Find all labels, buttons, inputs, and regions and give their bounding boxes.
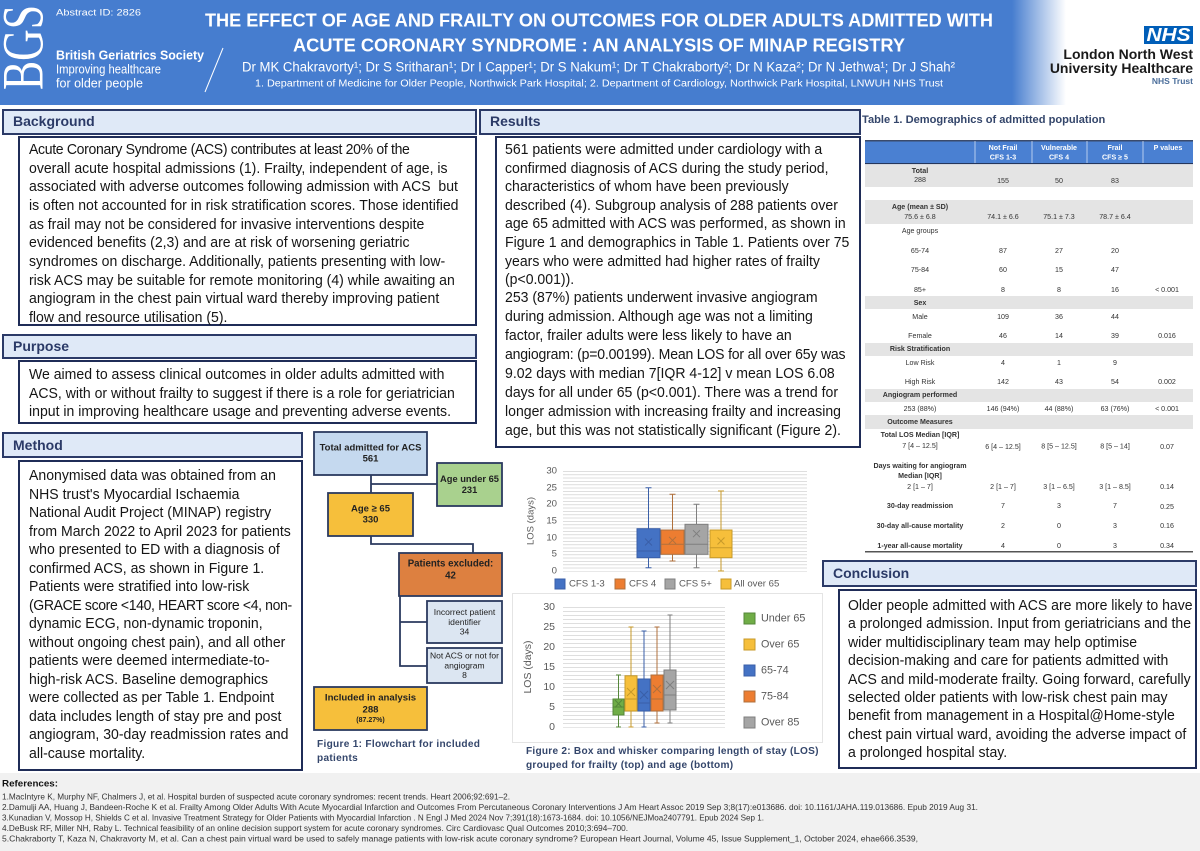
table header: Not Frail xyxy=(989,144,1017,152)
table rows: sex and risk: High Risk xyxy=(905,378,936,386)
legend: Over 65 xyxy=(761,638,799,650)
table rows: sex and risk: 39 xyxy=(1111,332,1119,340)
box: incorrect identifier: Incorrect patient xyxy=(434,607,496,617)
heading: purpose: Purpose xyxy=(13,338,69,354)
table rows: total and age: 50 xyxy=(1055,177,1063,185)
table rows: total and age xyxy=(892,167,1179,294)
table header: CFS 1-3 xyxy=(990,154,1016,162)
table rows: total and age: 288 xyxy=(914,176,926,184)
table rows: outcomes: 0.07 xyxy=(1160,443,1174,451)
legend: All over 65 xyxy=(734,578,779,590)
table rows: sex and risk: 43 xyxy=(1055,378,1063,386)
box: age 65 and over: 330 xyxy=(363,514,378,526)
table rows: total and age: 65-74 xyxy=(911,247,929,255)
table rows: outcomes: 3 xyxy=(1113,542,1117,550)
y axis labels: 15 xyxy=(546,516,557,526)
table rows: total and age: 15 xyxy=(1055,266,1063,274)
box: 65-74 xyxy=(638,631,650,727)
table rows: angiogram: Angiogram performed xyxy=(883,391,957,399)
table rows: outcomes: 0.34 xyxy=(1160,542,1174,550)
box: included: 288 xyxy=(362,704,379,716)
table rows: outcomes: 0.16 xyxy=(1160,522,1174,530)
table rows: outcomes: 2 xyxy=(1001,522,1005,530)
table rows: total and age: 20 xyxy=(1111,247,1119,255)
panel: purpose text xyxy=(18,360,477,424)
table rows: total and age: 87 xyxy=(999,247,1007,255)
table rows: sex and risk: 0.002 xyxy=(1158,378,1176,386)
box: not ACS xyxy=(427,648,502,683)
legend: 65-74 xyxy=(761,664,789,676)
table rows: sex and risk: Sex xyxy=(914,299,926,307)
box: included: (87.27%) xyxy=(356,717,385,724)
table rows: sex and risk: 1 xyxy=(1057,359,1061,367)
table rows: total and age: Total xyxy=(912,167,928,175)
box: CFS 1-3 xyxy=(637,488,660,568)
authors: Dr MK Chakravorty¹; Dr S Sritharan¹; Dr I Capper¹; Dr S Nakum¹; Dr T Chakraborty²; Dr N Kaza²; Dr N Jethwa¹; Dr J Shah² xyxy=(242,60,955,74)
table rows: outcomes: 6 [4 – 12.5] xyxy=(985,443,1021,451)
legend: Under 65 xyxy=(761,612,805,624)
table rows: sex and risk xyxy=(890,299,1176,386)
y axis labels: 10 xyxy=(546,532,557,544)
trust name: University Healthcare xyxy=(1050,60,1193,76)
heading: results xyxy=(479,109,861,135)
trust name: NHS Trust xyxy=(1152,76,1193,86)
caption: figure 2: Figure 2: Box and whisker comparing length of stay (LOS) grouped for frailty (top) and age (bottom) xyxy=(526,746,819,771)
table rows: sex and risk: 4 xyxy=(1001,359,1005,367)
logo divider slash xyxy=(205,48,223,92)
table rows: total and age: 78.7 ± 6.4 xyxy=(1099,213,1131,221)
table rows: total and age: 85+ xyxy=(914,286,926,294)
table rows: total and age: 75.1 ± 7.3 xyxy=(1043,213,1075,221)
table rows: outcomes: 3 xyxy=(1057,502,1061,510)
y axis labels: 25 xyxy=(546,482,557,494)
chart: LOS by age xyxy=(512,593,823,743)
table rows: angiogram: 253 (88%) xyxy=(904,405,936,413)
table rows: outcomes: 30-day all-cause mortality xyxy=(877,522,963,530)
society name xyxy=(56,48,205,90)
legend xyxy=(555,578,779,590)
table rows: outcomes: 2 [1 – 7] xyxy=(990,483,1016,491)
reference list: 2.Damulji AA, Huang J, Bandeen-Roche K et al. Frailty Among Older Adults With Acute Myocardial Infarction and Outcomes From Percutaneous Coronary Interventions J Am Heart Assoc 2019 Sep 3;8(17):e013686. doi: 10.1161/JAHA.119.013686. Epub 2019 Aug 31. xyxy=(2,803,978,812)
legend: 75-84 xyxy=(761,690,789,702)
header banner xyxy=(0,0,1200,105)
results text block: 561 patients were admitted under cardiology with a confirmed diagnosis of ACS during the study period, characteristics of whom have been previously described (4). Subgroup analysis of 288 patients over age 65 admitted with ACS was performed, as shown in Figure 1 and demographics in Table 1. Patients over 75 years who were admitted had higher rates of frailty (p<0.001)). xyxy=(505,142,849,288)
box: total admitted: Total admitted for ACS xyxy=(320,442,421,454)
table header: CFS ≥ 5 xyxy=(1102,154,1128,162)
society name: British Geriatrics Society xyxy=(56,48,205,62)
heading: purpose xyxy=(2,334,477,359)
box: not ACS: angiogram xyxy=(444,660,485,670)
panel: method text xyxy=(18,460,303,771)
box: age under 65: 231 xyxy=(462,485,477,495)
y axis labels: 20 xyxy=(543,641,555,653)
society name: for older people xyxy=(56,76,143,90)
method text block: Anonymised data was obtained from an NHS trust's Myocardial Ischaemia National Audit Project (MINAP) registry from March 2022 to April 2023 for patients who presented to ED with a diagnosis of confirmed ACS, as shown in Figure 1. Patients were stratified into low-risk (GRACE score <140, HEART score <4, non- dynamic ECG, non-dynamic troponin, without ongoing chest pain), and all other patients were deemed intermediate-to- high-risk ACS. Baseline demographics were collected as per Table 1. Endpoint data includes length of stay pre and post angiogram, 30-day readmission rates and all-cause mortality. xyxy=(29,468,292,762)
table rows: total and age: 60 xyxy=(999,266,1007,274)
references panel xyxy=(0,773,1200,851)
table rows: total and age: 27 xyxy=(1055,247,1063,255)
heading: results: Results xyxy=(490,113,541,129)
table rows: outcomes: 7 xyxy=(1001,502,1005,510)
reference list: 1.MacIntyre K, Murphy NF, Chalmers J, et al. Hospital burden of suspected acute coronary syndromes: recent trends. Heart 2006;92:691–2. xyxy=(2,792,510,802)
table rows: sex and risk: 46 xyxy=(999,332,1007,340)
table rows: total and age: 155 xyxy=(997,177,1009,185)
table rows: sex and risk: Low Risk xyxy=(906,359,935,367)
table rows: total and age: 16 xyxy=(1111,286,1119,294)
table rows: total and age: 83 xyxy=(1111,177,1119,185)
legend xyxy=(744,612,805,728)
reference list: 5.Chakraborty T, Kaza N, Chakravorty M, et al. Can a chest pain virtual ward be used to safely manage patients with low-risk acute coronary syndrome? European Heart Journal, Volume 45, Issue Supplement_1, October 2024, ehae666.3539, xyxy=(2,834,918,844)
panel: results text xyxy=(495,136,861,448)
trust name: London North West xyxy=(1063,46,1193,62)
reference list: 4.DeBusk RF, Miller NH, Raby L. Technical feasibility of an online decision support system for acute coronary syndromes. Circ Cardiovasc Qual Outcomes 2010;3:694–700. xyxy=(2,824,628,833)
table rows: total and age: 75.6 ± 6.8 xyxy=(904,213,936,221)
table rows: outcomes xyxy=(873,418,1174,550)
table: demographics xyxy=(865,140,1193,552)
caption: figure 1: Figure 1: Flowchart for included patients xyxy=(317,739,480,764)
table rows: outcomes: 0 xyxy=(1057,522,1061,530)
y axis title: LOS (days) xyxy=(522,640,534,694)
abstract id: Abstract ID: 2826 xyxy=(56,8,141,18)
flowchart xyxy=(313,431,503,731)
table rows: outcomes: Days waiting for angiogram xyxy=(873,462,967,470)
table header: CFS 4 xyxy=(1049,154,1069,162)
results text block 2: 253 (87%) patients underwent invasive angiogram during admission. Although age was not a limiting factor, frailer adults were less likely to have an angiogram: (p=0.00199). Mean LOS for all over 65y was 9.02 days with median 7[IQR 4-12] v mean LOS 6.08 days for all under 65 (p<0.001). There was a trend for longer admission with increasing frailty and increasing age, but this was not statistically significant (Figure 2). xyxy=(505,290,845,439)
table rows: total and age: Age (mean ± SD) xyxy=(892,203,949,211)
heading: background: Background xyxy=(13,113,95,129)
box: patients excluded xyxy=(399,553,502,596)
table rows: angiogram: 44 (88%) xyxy=(1045,405,1073,413)
box: age under 65 xyxy=(437,463,502,506)
box: incorrect identifier: 34 xyxy=(460,626,469,636)
box: incorrect identifier: identifier xyxy=(448,617,481,627)
box: 75-84 xyxy=(651,627,663,723)
trust name xyxy=(1050,46,1193,86)
y axis labels: 5 xyxy=(552,548,557,560)
y axis labels xyxy=(543,601,555,733)
box: total admitted xyxy=(314,432,427,475)
panel: background text xyxy=(18,136,477,326)
table header: P values xyxy=(1154,144,1182,152)
table header: Frail xyxy=(1108,144,1123,152)
table title: Table 1. Demographics of admitted population xyxy=(862,114,1105,126)
table rows: outcomes: Total LOS Median [IQR] xyxy=(881,431,959,439)
box: over 85 xyxy=(664,615,676,723)
table rows: total and age: < 0.001 xyxy=(1155,286,1179,294)
table rows: outcomes: 2 [1 – 7] xyxy=(907,483,933,491)
legend: CFS 4 xyxy=(629,578,657,590)
box: not ACS: Not ACS or not for xyxy=(430,650,499,660)
reference list xyxy=(2,792,978,844)
table rows: sex and risk: Male xyxy=(912,313,928,321)
box: not ACS: 8 xyxy=(462,670,467,680)
box: patients excluded: 42 xyxy=(445,570,456,582)
society name: Improving healthcare xyxy=(56,62,161,76)
affiliations: 1. Department of Medicine for Older People, Northwick Park Hospital; 2. Department of Cardiology, Northwick Park Hospital, LNWUH NHS Trust xyxy=(255,78,943,90)
table rows: sex and risk: 44 xyxy=(1111,313,1119,321)
heading: background xyxy=(2,109,477,135)
y axis labels: 30 xyxy=(546,466,557,476)
table header: Vulnerable xyxy=(1041,144,1077,152)
purpose text block: We aimed to assess clinical outcomes in older adults admitted with ACS, with or without frailty to suggest if there is a role for geriatrician input in improving healthcare usage and preventing adverse events. xyxy=(29,367,455,420)
table rows: outcomes: 0 xyxy=(1057,542,1061,550)
box: age 65 and over: Age ≥ 65 xyxy=(351,504,391,514)
box: age under 65: Age under 65 xyxy=(440,474,499,484)
table rows: outcomes: 3 [1 – 8.5] xyxy=(1099,483,1131,491)
table rows: outcomes: 1-year all-cause mortality xyxy=(877,542,963,550)
heading: method: Method xyxy=(13,437,63,453)
legend: CFS 1-3 xyxy=(569,578,605,590)
heading: conclusion xyxy=(822,560,1197,587)
title xyxy=(205,10,993,56)
y axis labels: 25 xyxy=(543,621,555,633)
box: incorrect identifier xyxy=(427,601,502,643)
chart: LOS by frailty xyxy=(526,466,807,590)
table rows: angiogram xyxy=(883,391,1179,413)
table rows: angiogram: < 0.001 xyxy=(1155,405,1179,413)
box: all over 65 xyxy=(710,491,732,571)
flow connectors xyxy=(371,475,473,666)
title: ACUTE CORONARY SYNDROME : AN ANALYSIS OF MINAP REGISTRY xyxy=(293,34,906,56)
table rows: sex and risk: 14 xyxy=(1055,332,1063,340)
heading: method xyxy=(2,432,303,458)
table rows: outcomes: 3 [1 – 6.5] xyxy=(1043,483,1075,491)
y axis labels: 30 xyxy=(543,601,555,613)
table rows: sex and risk: 0.016 xyxy=(1158,332,1176,340)
table rows: total and age: 74.1 ± 6.6 xyxy=(987,213,1019,221)
box: included: Included in analysis xyxy=(325,692,416,704)
table rows: outcomes: 0.25 xyxy=(1160,503,1174,511)
table rows: outcomes: 8 [5 – 12.5] xyxy=(1041,442,1077,450)
table rows: sex and risk: Risk Stratification xyxy=(890,345,950,353)
table rows: outcomes: Outcome Measures xyxy=(887,418,953,426)
table rows: sex and risk: 36 xyxy=(1055,313,1063,321)
box: over 65 xyxy=(625,627,637,727)
table rows: outcomes: 4 xyxy=(1001,542,1005,550)
box: CFS 5+ xyxy=(685,504,708,568)
y axis labels: 10 xyxy=(543,681,555,693)
references heading: References: xyxy=(2,778,58,790)
table rows: outcomes: 7 xyxy=(1113,502,1117,510)
table rows: sex and risk: 9 xyxy=(1113,359,1117,367)
background text block: Acute Coronary Syndrome (ACS) contributes at least 20% of the overall acute hospital admissions (1). Frailty, independent of age, is associated with adverse outcomes following admission with ACS but is often not accounted for in risk stratification scores. Those identified as frail may not be considered for invasive interventions despite evidenced benefits (2,3) and are at risk of worsening geriatric syndromes on discharge. Additionally, patients presenting with low- risk ACS may be suitable for remote monitoring (4) while awaiting an angiogram in the chest pain virtual ward thereby improving patient flow and resource utilisation (5). xyxy=(29,142,458,326)
table rows: sex and risk: Female xyxy=(908,332,932,340)
table rows: total and age: 8 xyxy=(1057,286,1061,294)
y axis labels: 0 xyxy=(549,721,555,733)
legend: Over 85 xyxy=(761,716,799,728)
box: CFS 4 xyxy=(661,494,684,561)
grey row bands xyxy=(865,165,1193,429)
table rows: total and age: 47 xyxy=(1111,266,1119,274)
table rows: outcomes: 3 xyxy=(1113,522,1117,530)
legend: CFS 5+ xyxy=(679,578,712,590)
logo: NHS: NHS xyxy=(1146,25,1190,45)
y axis labels: 0 xyxy=(552,566,557,576)
heading: conclusion: Conclusion xyxy=(833,565,909,581)
conclusion text block: Older people admitted with ACS are more likely to have a prolonged admission. Input from geriatricians and the wider multidisciplinary team may help optimise decision-making and care for patients admitted with ACS and mild-moderate frailty. Going forward, carefully selected older patients with low-risk chest pain may benefit from management in a Hospital@Home-style chest pain virtual ward, avoiding the adverse impact of a prolonged hospital stay. xyxy=(848,598,1193,761)
box: age 65 and over xyxy=(328,493,413,536)
y axis labels: 15 xyxy=(543,661,555,673)
table rows: outcomes: 30-day readmission xyxy=(887,502,953,510)
box: total admitted: 561 xyxy=(363,454,379,464)
table rows: outcomes: 7 [4 – 12.5] xyxy=(902,442,938,450)
table rows: sex and risk: 142 xyxy=(997,378,1009,386)
box: under 65 xyxy=(613,675,624,727)
table rows: outcomes: 0.14 xyxy=(1160,483,1174,491)
y axis labels: 20 xyxy=(546,498,557,510)
y axis title: LOS (days) xyxy=(526,497,536,545)
title: THE EFFECT OF AGE AND FRAILTY ON OUTCOMES FOR OLDER ADULTS ADMITTED WITH xyxy=(205,10,993,30)
table rows: sex and risk: 109 xyxy=(997,313,1009,321)
y axis labels xyxy=(546,466,557,576)
reference list: 3.Kunadian V, Mossop H, Shields C et al. Invasive Treatment Strategy for Older Patients with Myocardial Infarction . N Engl J Med 2024 Nov 7;391(18):1673-1684. doi: 10.1056/NEJMoa2407791. Epub 2024 Sep 1. xyxy=(2,814,764,822)
box: included xyxy=(314,687,427,730)
table rows: total and age: Age groups xyxy=(902,227,939,235)
box: patients excluded: Patients excluded: xyxy=(408,558,493,570)
table rows: outcomes: 8 [5 – 14] xyxy=(1100,442,1130,450)
table rows: angiogram: 146 (94%) xyxy=(987,405,1019,413)
table rows: angiogram: 63 (76%) xyxy=(1101,405,1129,413)
table rows: total and age: 8 xyxy=(1001,286,1005,294)
table header xyxy=(865,140,1193,164)
table rows: total and age: 75-84 xyxy=(911,266,929,274)
panel: conclusion text xyxy=(838,589,1197,769)
table rows: sex and risk: 54 xyxy=(1111,378,1119,386)
y axis labels: 5 xyxy=(549,701,555,713)
table rows: outcomes: Median [IQR] xyxy=(898,472,942,480)
